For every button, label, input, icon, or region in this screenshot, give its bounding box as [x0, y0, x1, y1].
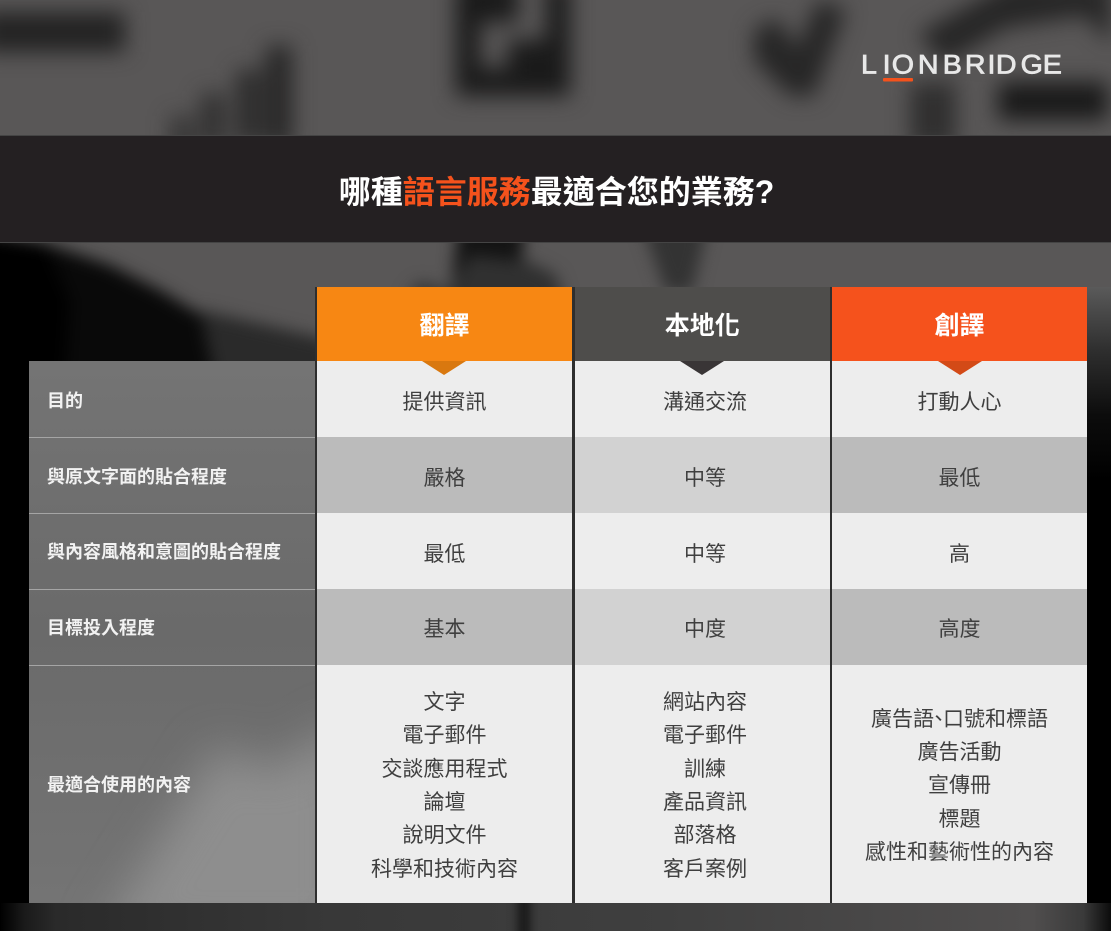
column 1 row 5: content list: 電子郵件 [402, 724, 486, 747]
column 2 row 4: 中度 [684, 618, 726, 641]
column 3 row 4: 高度 [938, 618, 980, 641]
row label: target engagement: 目標投入程度 [47, 618, 155, 638]
row label: closeness to source text: 與原文字面的貼合程度 [47, 466, 227, 486]
column 2 row 5: content list: 客戶案例 [663, 858, 747, 881]
row label: closeness to style and intent [29, 514, 315, 590]
column header: localization: 本地化 [665, 312, 740, 340]
column header: transcreation: 創譯 [934, 312, 984, 340]
title band [0, 135, 1111, 243]
column 1 row 3: 最低 [424, 543, 466, 566]
column 3 row 5: content list: 廣告活動 [918, 741, 1002, 764]
arrow: localization [680, 361, 724, 375]
column 1 row 5: content list: 交談應用程式 [382, 758, 508, 781]
column 1 row 5: content list: 論壇 [424, 791, 466, 814]
column 3 row 2 [832, 437, 1087, 513]
column 3 row 2: 最低 [938, 467, 980, 490]
column header: translation [317, 287, 572, 361]
row label: closeness to source text [29, 438, 315, 514]
column 3 row 1 [832, 361, 1087, 437]
column 2 row 3 [574, 513, 830, 589]
column 2 row 4 [574, 589, 830, 665]
column 1 row 3 [317, 513, 572, 589]
column 1 row 4: 基本 [424, 618, 466, 641]
column 2 row 5: content list [574, 665, 830, 903]
row label: target engagement [29, 590, 315, 666]
column 1 row 5: content list [317, 665, 572, 903]
column 2 row 3: 中等 [684, 543, 726, 566]
column 1 row 1: 提供資訊 [402, 391, 486, 414]
column 1 row 5: content list: 說明文件 [402, 824, 486, 847]
column 1 row 5: content list: 科學和技術內容 [371, 858, 518, 881]
column 3 row 5: content list: 宣傳冊 [928, 774, 991, 797]
column 2 row 5: content list: 網站內容 [663, 691, 747, 714]
column 2 row 5: content list: 訓練 [684, 758, 726, 781]
column 1 row 2: 嚴格 [424, 467, 466, 490]
column 3 row 4 [832, 589, 1087, 665]
column 3 row 5: content list [832, 665, 1087, 903]
column header: transcreation [832, 287, 1087, 361]
arrow: translation [422, 361, 466, 375]
column 3 row 5: content list: 感性和藝術性的內容 [865, 841, 1054, 864]
row label: purpose: 目的 [47, 391, 83, 411]
column 3 row 5: content list: 標題 [938, 808, 980, 831]
column 3 row 3 [832, 513, 1087, 589]
column 2 row 5: content list: 電子郵件 [663, 724, 747, 747]
title: 哪種語言服務最適合您的業務? [339, 174, 774, 210]
panel: row labels [29, 361, 315, 903]
column 2 row 5: content list: 部落格 [674, 824, 736, 847]
arrow: transcreation [938, 361, 982, 375]
column header: localization [574, 287, 830, 361]
column 2 row 1 [574, 361, 830, 437]
column 2 row 2: 中等 [684, 467, 726, 490]
logo: Lionbridge: LIONBRIDGE [861, 49, 1062, 79]
column header: translation: 翻譯 [419, 312, 470, 340]
column 1 row 2 [317, 437, 572, 513]
column 2 row 1: 溝通交流 [663, 391, 747, 414]
column 2 row 2 [574, 437, 830, 513]
column 1 row 1 [317, 361, 572, 437]
row label: purpose [29, 361, 315, 438]
row label: closeness to style and intent: 與內容風格和意圖的貼合程度 [47, 542, 281, 562]
column 1 row 4 [317, 589, 572, 665]
column 3 row 1: 打動人心 [918, 391, 1002, 414]
column 3 row 3: 高 [949, 543, 970, 566]
row label: best content: 最適合使用的內容 [47, 774, 191, 794]
column 1 row 5: content list: 文字 [424, 691, 466, 714]
column 3 row 5: content list: 廣告語、口號和標語 [871, 708, 1048, 731]
column 2 row 5: content list: 產品資訊 [663, 791, 747, 814]
